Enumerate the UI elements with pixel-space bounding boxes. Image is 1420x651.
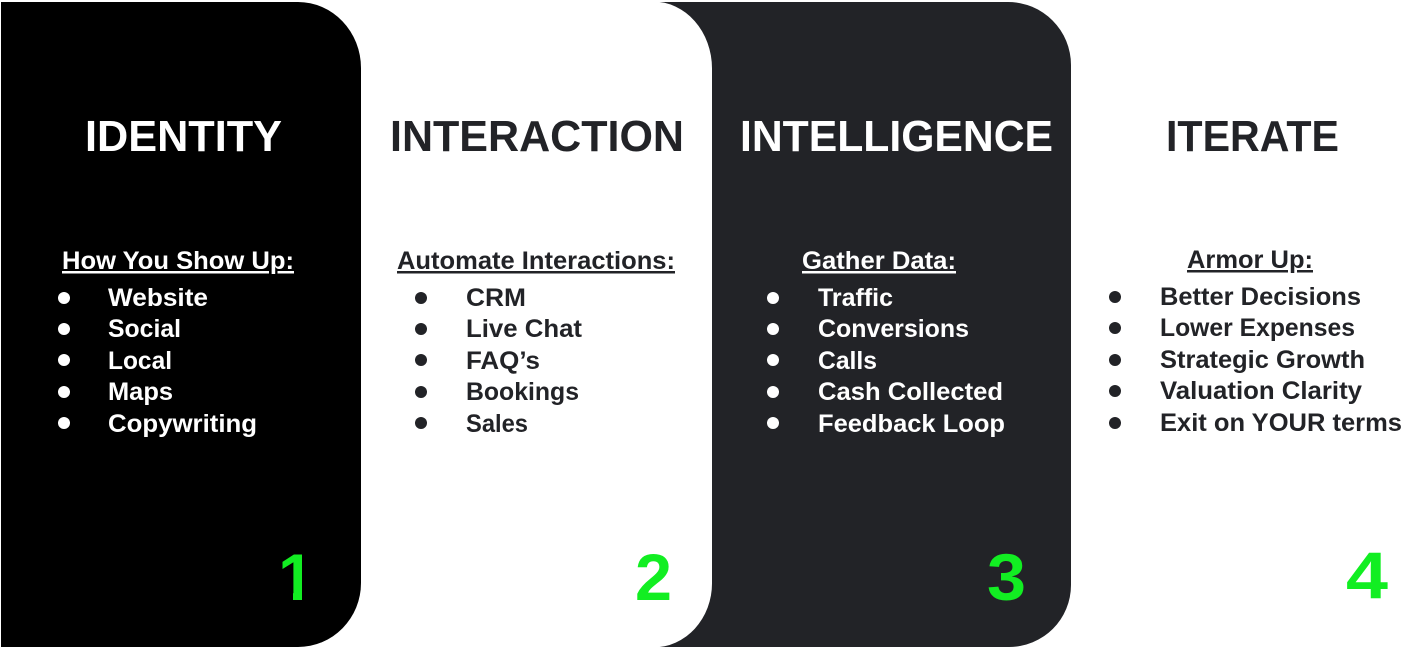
list: interaction items bbox=[415, 284, 583, 438]
list: iterate items: Better Decisions bbox=[1160, 283, 1361, 311]
number 2: 2 bbox=[635, 540, 672, 614]
list: interaction items: Sales bbox=[466, 410, 528, 438]
list: identity items: Social bbox=[108, 315, 181, 343]
subheading: gather data: Gather Data: bbox=[802, 247, 956, 275]
list: interaction items: Live Chat bbox=[466, 315, 583, 343]
heading: iterate: ITERATE bbox=[1166, 112, 1339, 161]
list: iterate items: Strategic Growth bbox=[1160, 346, 1365, 374]
heading: intelligence: INTELLIGENCE bbox=[740, 112, 1053, 161]
list: iterate items: Exit on YOUR terms bbox=[1160, 409, 1402, 437]
list: identity items: Local bbox=[108, 347, 172, 375]
heading: identity: IDENTITY bbox=[85, 112, 282, 161]
number 1: 1 bbox=[278, 540, 315, 614]
panel: identity card bbox=[1, 2, 361, 647]
list: intelligence items: Traffic bbox=[818, 284, 893, 312]
list: identity items: Maps bbox=[108, 378, 173, 406]
list: intelligence items: Conversions bbox=[818, 315, 969, 343]
list: interaction items: CRM bbox=[466, 284, 526, 312]
list: identity items: Copywriting bbox=[108, 410, 257, 438]
subheading: how you show up: How You Show Up: bbox=[62, 247, 294, 275]
panel: interaction content bbox=[390, 112, 684, 614]
list: identity items bbox=[58, 284, 257, 438]
list: intelligence items bbox=[767, 284, 1005, 438]
list: interaction items: FAQ’s bbox=[466, 347, 540, 375]
panel: iterate content bbox=[1109, 112, 1402, 612]
list: iterate items: Lower Expenses bbox=[1160, 314, 1355, 342]
panel: intelligence card background bbox=[600, 2, 1071, 647]
list: iterate items bbox=[1109, 283, 1402, 437]
list: interaction items: Bookings bbox=[466, 378, 579, 406]
list: identity items: Website bbox=[108, 284, 208, 312]
number 4: 4 bbox=[1346, 538, 1388, 612]
list: iterate items: Valuation Clarity bbox=[1160, 377, 1362, 405]
list: intelligence items: Feedback Loop bbox=[818, 410, 1005, 438]
panel: intelligence content bbox=[740, 112, 1053, 614]
subheading: armor up: Armor Up: bbox=[1187, 246, 1313, 274]
panel: interaction card background bbox=[600, 2, 712, 648]
list: intelligence items: Cash Collected bbox=[818, 378, 1003, 406]
subheading: automate interactions: Automate Interactions: bbox=[397, 247, 675, 275]
number 3: 3 bbox=[987, 540, 1026, 614]
list: intelligence items: Calls bbox=[818, 347, 877, 375]
heading: interaction: INTERACTION bbox=[390, 112, 684, 161]
